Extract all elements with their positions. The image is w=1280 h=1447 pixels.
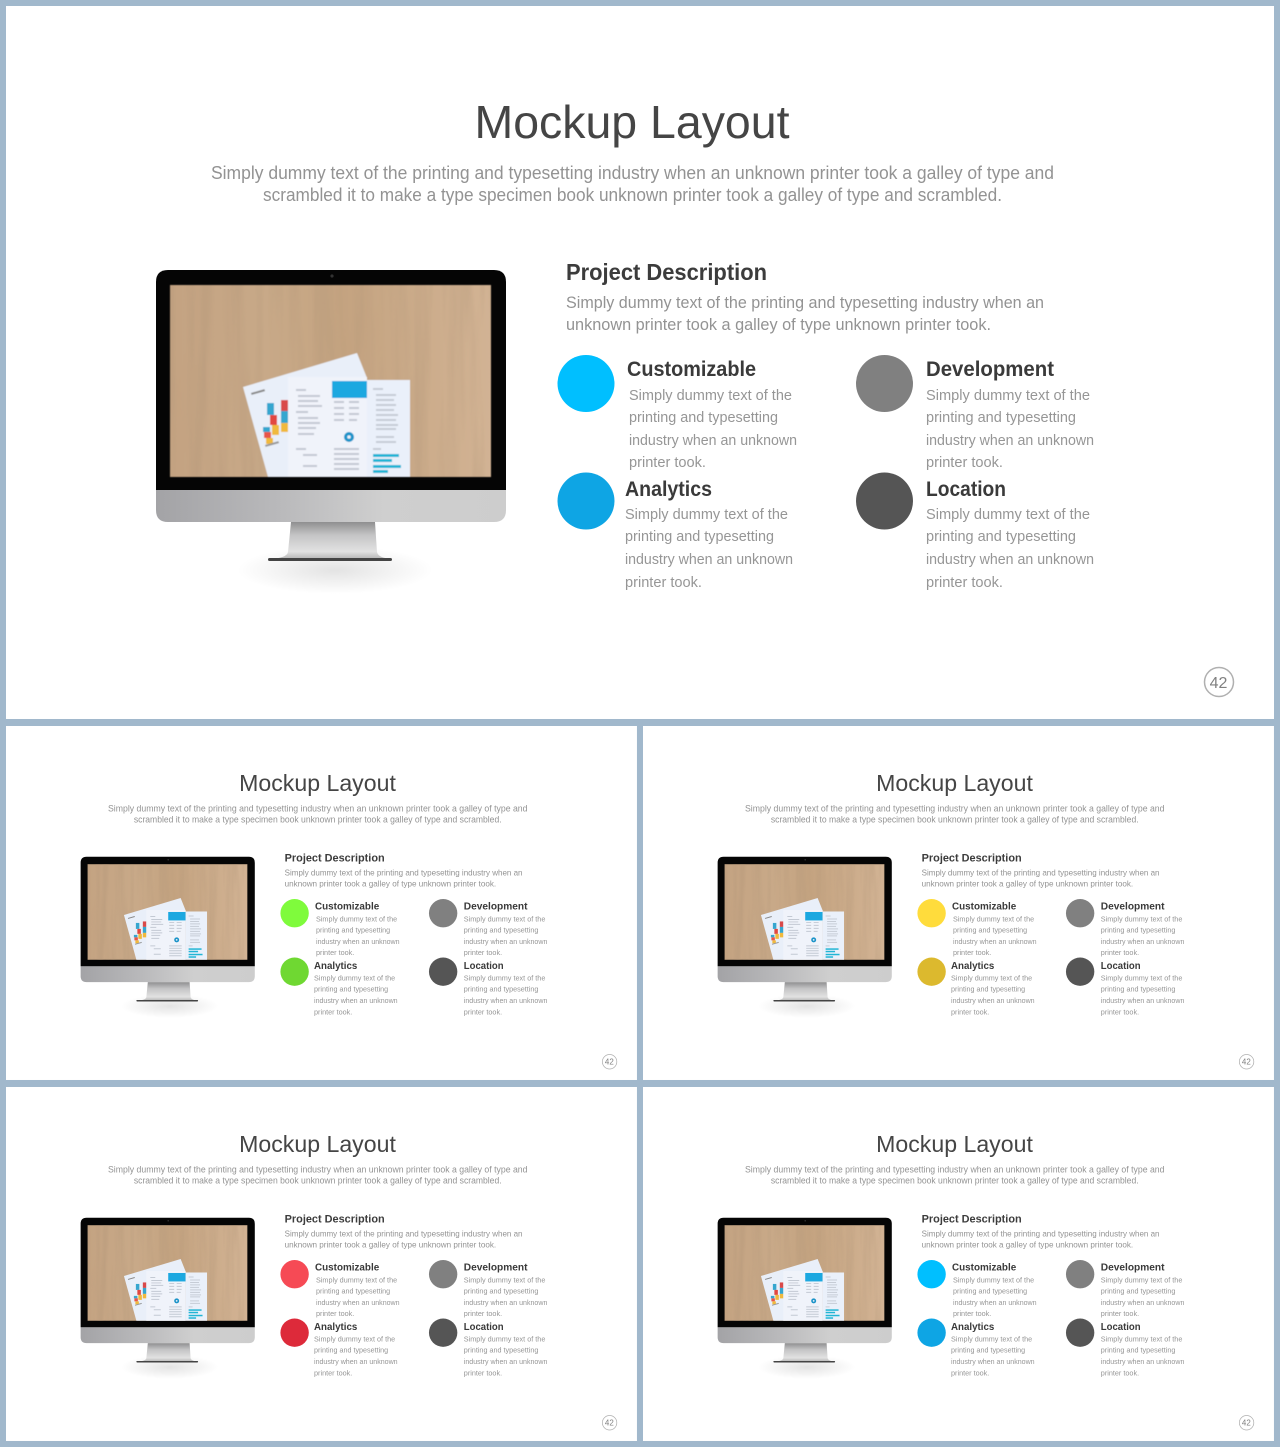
item: analytics <box>951 961 1035 1016</box>
project description text <box>922 1229 1160 1250</box>
item: development: Simply dummy text of the <box>1101 914 1182 923</box>
page number <box>1239 1416 1254 1430</box>
item: location: industry when an unknown <box>464 1357 547 1366</box>
item: development: Simply dummy text of the <box>464 914 545 923</box>
item: location: industry when an unknown <box>464 996 547 1005</box>
item: customizable: printer took. <box>953 948 991 957</box>
item: customizable: Simply dummy text of the <box>629 387 792 404</box>
item: development <box>1101 1262 1184 1318</box>
item: customizable <box>952 901 1037 957</box>
project description text: Simply dummy text of the printing and typesetting industry when an <box>922 868 1160 878</box>
monitor mockup <box>156 270 506 594</box>
item: customizable: Customizable <box>315 1262 379 1273</box>
item: analytics: industry when an unknown <box>951 1357 1035 1366</box>
icon: customizable circle <box>558 355 614 412</box>
project description text: unknown printer took a galley of type unknown printer took. <box>285 879 496 889</box>
project description text <box>285 868 523 889</box>
item: development <box>1101 901 1184 957</box>
item: development: industry when an unknown <box>926 432 1094 449</box>
item: location: printing and typesetting <box>1101 1346 1175 1355</box>
item: location: Simply dummy text of the <box>464 974 545 983</box>
item: analytics <box>314 961 398 1016</box>
item: development: printer took. <box>1101 1309 1139 1318</box>
panel: small blue slide background <box>643 1087 1274 1441</box>
item: analytics: printing and typesetting <box>951 985 1025 994</box>
item: development: printing and typesetting <box>464 1286 538 1295</box>
page number: 42 <box>605 1058 614 1067</box>
item: location <box>926 478 1094 591</box>
project description text: Simply dummy text of the printing and typesetting industry when an <box>285 1229 523 1239</box>
monitor mockup <box>718 857 892 1018</box>
item: customizable: industry when an unknown <box>629 432 797 449</box>
item: customizable: Customizable <box>627 358 756 381</box>
item: customizable <box>627 358 797 471</box>
monitor mockup <box>81 857 255 1018</box>
item: location <box>1101 961 1184 1016</box>
item: customizable: Simply dummy text of the <box>953 914 1034 923</box>
item: customizable: industry when an unknown <box>316 937 400 946</box>
item: location: Simply dummy text of the <box>1101 1335 1182 1344</box>
slide 5: small blue slide <box>643 1087 1274 1441</box>
item: development: industry when an unknown <box>464 1298 547 1307</box>
project description text: Simply dummy text of the printing and typesetting industry when an <box>922 1229 1160 1239</box>
item: development <box>464 1262 547 1318</box>
page number: 42 <box>1210 675 1228 692</box>
item: location <box>464 1322 547 1377</box>
monitor base <box>268 558 392 561</box>
monitor bezel <box>156 270 506 490</box>
item: analytics: printing and typesetting <box>314 985 388 994</box>
item: location: industry when an unknown <box>1101 996 1184 1005</box>
page number <box>1204 668 1234 696</box>
panel: large slide background <box>6 6 1274 719</box>
item: analytics: printer took. <box>951 1007 989 1016</box>
panel: green slide background <box>6 726 637 1080</box>
item: analytics: industry when an unknown <box>951 996 1035 1005</box>
project description text <box>566 293 1044 334</box>
item: customizable: Customizable <box>952 1262 1016 1273</box>
item: customizable <box>315 901 400 957</box>
item: development: printer took. <box>926 454 1003 471</box>
item: development: printing and typesetting <box>464 925 538 934</box>
subtitle <box>108 803 528 824</box>
subtitle <box>745 1164 1165 1185</box>
item: customizable: printing and typesetting <box>629 409 778 426</box>
title: Mockup Layout <box>239 770 397 796</box>
item: location: printing and typesetting <box>1101 985 1175 994</box>
item: analytics: printer took. <box>314 1368 352 1377</box>
item: analytics: industry when an unknown <box>314 1357 398 1366</box>
item: location: printer took. <box>926 574 1003 591</box>
item: location: Location <box>1101 1322 1141 1333</box>
item: location: Simply dummy text of the <box>464 1335 545 1344</box>
project description text <box>922 868 1160 889</box>
subtitle: Simply dummy text of the printing and typesetting industry when an unknown printer took a galley of type and <box>745 1164 1165 1174</box>
monitor shadow <box>237 546 433 594</box>
item: analytics: printer took. <box>314 1007 352 1016</box>
project description heading: Project Description <box>922 1214 1022 1226</box>
icon: customizable circle <box>280 899 309 927</box>
item: development: Development <box>464 901 528 912</box>
item: analytics: Analytics <box>951 1322 994 1333</box>
icon: development circle <box>1066 1260 1094 1288</box>
item: location: printing and typesetting <box>464 1346 538 1355</box>
monitor mockup <box>718 1218 892 1379</box>
item: analytics: Analytics <box>951 961 994 972</box>
icon: customizable circle <box>917 899 946 927</box>
icon: location circle <box>429 958 457 986</box>
subtitle <box>745 803 1165 824</box>
item: development: printer took. <box>464 948 502 957</box>
item: customizable: industry when an unknown <box>953 937 1037 946</box>
page number: 42 <box>605 1419 614 1428</box>
title: Mockup Layout <box>239 1131 397 1157</box>
item: analytics: industry when an unknown <box>314 996 398 1005</box>
item: location: printing and typesetting <box>464 985 538 994</box>
item: analytics <box>314 1322 398 1377</box>
item: location: Simply dummy text of the <box>926 506 1090 523</box>
subtitle: scrambled it to make a type specimen book unknown printer took a galley of type and scrambled. <box>771 1175 1139 1185</box>
icon: customizable circle <box>280 1260 309 1288</box>
project description text: unknown printer took a galley of type unknown printer took. <box>285 1240 496 1250</box>
project description heading: Project Description <box>285 853 385 865</box>
subtitle <box>211 163 1054 205</box>
item: development: Simply dummy text of the <box>1101 1275 1182 1284</box>
subtitle: scrambled it to make a type specimen book unknown printer took a galley of type and scrambled. <box>134 814 502 824</box>
item: analytics: Simply dummy text of the <box>951 974 1032 983</box>
icon: customizable circle <box>917 1260 946 1288</box>
item: location: Location <box>464 961 504 972</box>
page number: 42 <box>1242 1419 1251 1428</box>
item: analytics: Simply dummy text of the <box>625 506 788 523</box>
title: Mockup Layout <box>474 96 790 148</box>
icon: development circle <box>1066 899 1094 927</box>
item: customizable: printing and typesetting <box>316 1286 390 1295</box>
item: location: printer took. <box>1101 1368 1139 1377</box>
item: customizable: printing and typesetting <box>953 925 1027 934</box>
item: development: industry when an unknown <box>1101 1298 1184 1307</box>
title: Mockup Layout <box>876 770 1034 796</box>
monitor chin <box>156 490 506 522</box>
icon: analytics circle <box>558 472 614 530</box>
item: customizable: printer took. <box>316 1309 354 1318</box>
item: customizable: printing and typesetting <box>953 1286 1027 1295</box>
page number <box>1239 1055 1254 1069</box>
paper: tilted chart sheet <box>243 353 367 477</box>
item: location: printer took. <box>464 1368 502 1377</box>
item: development: printer took. <box>1101 948 1139 957</box>
slide 3: yellow slide <box>643 726 1274 1080</box>
item: customizable: Simply dummy text of the <box>316 1275 397 1284</box>
icon: analytics circle <box>280 958 309 986</box>
project description text: Simply dummy text of the printing and typesetting industry when an <box>566 293 1044 312</box>
slide 4: red slide <box>6 1087 637 1441</box>
item: development: Development <box>1101 1262 1165 1273</box>
item: analytics: printer took. <box>951 1368 989 1377</box>
icon: location circle <box>1066 958 1094 986</box>
item: development: industry when an unknown <box>464 937 547 946</box>
item: customizable: Customizable <box>315 901 379 912</box>
icon: analytics circle <box>280 1319 309 1347</box>
item: development: Simply dummy text of the <box>464 1275 545 1284</box>
icon: development circle <box>429 1260 457 1288</box>
item: customizable: printer took. <box>953 1309 991 1318</box>
item: analytics: printer took. <box>625 574 702 591</box>
item: analytics: Analytics <box>625 478 712 501</box>
project description text: unknown printer took a galley of type unknown printer took. <box>566 315 991 334</box>
project description text: Simply dummy text of the printing and typesetting industry when an <box>285 868 523 878</box>
item: customizable: industry when an unknown <box>316 1298 400 1307</box>
paper: right sheet <box>367 380 410 477</box>
subtitle: scrambled it to make a type specimen book unknown printer took a galley of type and scrambled. <box>263 185 1002 205</box>
item: customizable: industry when an unknown <box>953 1298 1037 1307</box>
item: development: Simply dummy text of the <box>926 387 1090 404</box>
slide 2: green slide <box>6 726 637 1080</box>
icon: location circle <box>429 1319 457 1347</box>
subtitle <box>108 1164 528 1185</box>
item: analytics <box>951 1322 1035 1377</box>
monitor stand <box>270 522 392 559</box>
item: analytics: printing and typesetting <box>314 1346 388 1355</box>
item: location: printer took. <box>464 1007 502 1016</box>
webcam <box>330 274 334 278</box>
project description text: unknown printer took a galley of type unknown printer took. <box>922 879 1133 889</box>
item: development: printing and typesetting <box>1101 1286 1175 1295</box>
item: analytics: Simply dummy text of the <box>314 1335 395 1344</box>
item: development: Development <box>926 358 1054 381</box>
project description heading: Project Description <box>285 1214 385 1226</box>
item: customizable: Simply dummy text of the <box>953 1275 1034 1284</box>
icon: location circle <box>856 472 913 530</box>
subtitle: Simply dummy text of the printing and typesetting industry when an unknown printer took a galley of type and <box>211 163 1054 183</box>
item: customizable: printer took. <box>316 948 354 957</box>
page number: 42 <box>1242 1058 1251 1067</box>
item: customizable <box>315 1262 400 1318</box>
item: development <box>926 358 1094 471</box>
subtitle: Simply dummy text of the printing and typesetting industry when an unknown printer took a galley of type and <box>745 803 1165 813</box>
item: location: industry when an unknown <box>1101 1357 1184 1366</box>
icon: development circle <box>856 355 913 412</box>
item: analytics: Analytics <box>314 961 357 972</box>
subtitle: scrambled it to make a type specimen book unknown printer took a galley of type and scrambled. <box>771 814 1139 824</box>
item: analytics: Analytics <box>314 1322 357 1333</box>
item: location: Location <box>464 1322 504 1333</box>
item: analytics: Simply dummy text of the <box>951 1335 1032 1344</box>
icon: development circle <box>429 899 457 927</box>
icon: analytics circle <box>917 1319 946 1347</box>
item: customizable: Simply dummy text of the <box>316 914 397 923</box>
item: analytics: industry when an unknown <box>625 551 793 568</box>
item: location <box>1101 1322 1184 1377</box>
item: location: industry when an unknown <box>926 551 1094 568</box>
page number <box>602 1055 617 1069</box>
screen: wood photo <box>170 285 491 477</box>
item: location: printer took. <box>1101 1007 1139 1016</box>
item: development: printing and typesetting <box>926 409 1076 426</box>
page number <box>602 1416 617 1430</box>
item: analytics: printing and typesetting <box>951 1346 1025 1355</box>
title: Mockup Layout <box>876 1131 1034 1157</box>
item: customizable: printer took. <box>629 454 706 471</box>
project description heading: Project Description <box>922 853 1022 865</box>
item: customizable: printing and typesetting <box>316 925 390 934</box>
project description text: unknown printer took a galley of type unknown printer took. <box>922 1240 1133 1250</box>
project description heading: Project Description <box>566 259 767 285</box>
item: analytics: printing and typesetting <box>625 528 774 545</box>
panel: yellow slide background <box>643 726 1274 1080</box>
project description text <box>285 1229 523 1250</box>
subtitle: Simply dummy text of the printing and typesetting industry when an unknown printer took a galley of type and <box>108 1164 528 1174</box>
slide 1: large blue slide <box>6 6 1274 719</box>
item: development: Development <box>1101 901 1165 912</box>
panel: red slide background <box>6 1087 637 1441</box>
item: location: Location <box>1101 961 1141 972</box>
item: development: printer took. <box>464 1309 502 1318</box>
subtitle: scrambled it to make a type specimen book unknown printer took a galley of type and scrambled. <box>134 1175 502 1185</box>
item: location: Location <box>926 478 1006 501</box>
icon: analytics circle <box>917 958 946 986</box>
item: development: Development <box>464 1262 528 1273</box>
item: development <box>464 901 547 957</box>
item: location <box>464 961 547 1016</box>
item: customizable: Customizable <box>952 901 1016 912</box>
item: development: printing and typesetting <box>1101 925 1175 934</box>
item: customizable <box>952 1262 1037 1318</box>
item: analytics: Simply dummy text of the <box>314 974 395 983</box>
item: location: printing and typesetting <box>926 528 1076 545</box>
item: analytics <box>625 478 793 591</box>
subtitle: Simply dummy text of the printing and typesetting industry when an unknown printer took a galley of type and <box>108 803 528 813</box>
monitor mockup <box>81 1218 255 1379</box>
item: location: Simply dummy text of the <box>1101 974 1182 983</box>
paper: centre sheet <box>288 377 367 477</box>
item: development: industry when an unknown <box>1101 937 1184 946</box>
icon: location circle <box>1066 1319 1094 1347</box>
